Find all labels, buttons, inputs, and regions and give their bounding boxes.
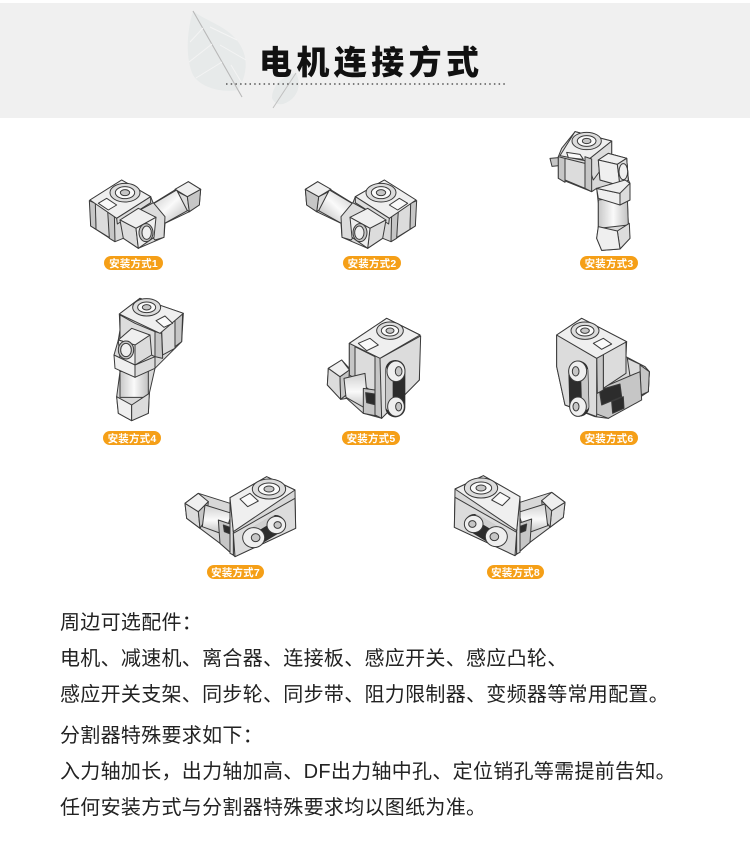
text: special requirements heading: 分割器特殊要求如下： — [60, 725, 263, 747]
title: 电机连接方式 — [259, 36, 483, 84]
text: requirements line 2: 任何安装方式与分割器特殊要求均以图纸为准。 — [60, 797, 486, 819]
label: mode 3: 安装方式3 — [585, 257, 633, 270]
mounting diagram 7 — [185, 477, 296, 557]
icon: large leaf — [188, 11, 246, 97]
label: mode 5: 安装方式5 — [347, 432, 395, 445]
text: parts list line 1: 电机、减速机、离合器、连接板、感应开关、感应凸轮、 — [60, 648, 568, 670]
icon: small leaf — [272, 73, 299, 108]
mounting diagram 3 — [550, 132, 630, 250]
label: mode 7: 安装方式7 — [211, 566, 260, 579]
label: mode 2: 安装方式2 — [348, 257, 396, 270]
mounting diagram 6 — [557, 318, 649, 418]
text: requirements line 1: 入力轴加长，出力轴加高、DF出力轴中孔、定位销孔等需提前告知。 — [60, 761, 676, 783]
mounting diagram 4 — [114, 298, 183, 421]
label: mode 6: 安装方式6 — [585, 432, 633, 445]
label: mode 8: 安装方式8 — [491, 566, 540, 579]
mounting diagram 2 — [305, 180, 417, 248]
label: mode 4: 安装方式4 — [108, 432, 156, 445]
text: optional parts heading: 周边可选配件： — [60, 612, 202, 634]
label: mode 1: 安装方式1 — [109, 257, 158, 270]
text: parts list line 2: 感应开关支架、同步轮、同步带、阻力限制器、变频器等常用配置。 — [60, 684, 669, 706]
mounting diagram 8 — [454, 476, 565, 556]
header band — [0, 3, 750, 118]
mounting diagram 5 — [327, 318, 421, 418]
title dotted underline — [226, 83, 506, 85]
mounting diagram 1 — [89, 180, 201, 248]
